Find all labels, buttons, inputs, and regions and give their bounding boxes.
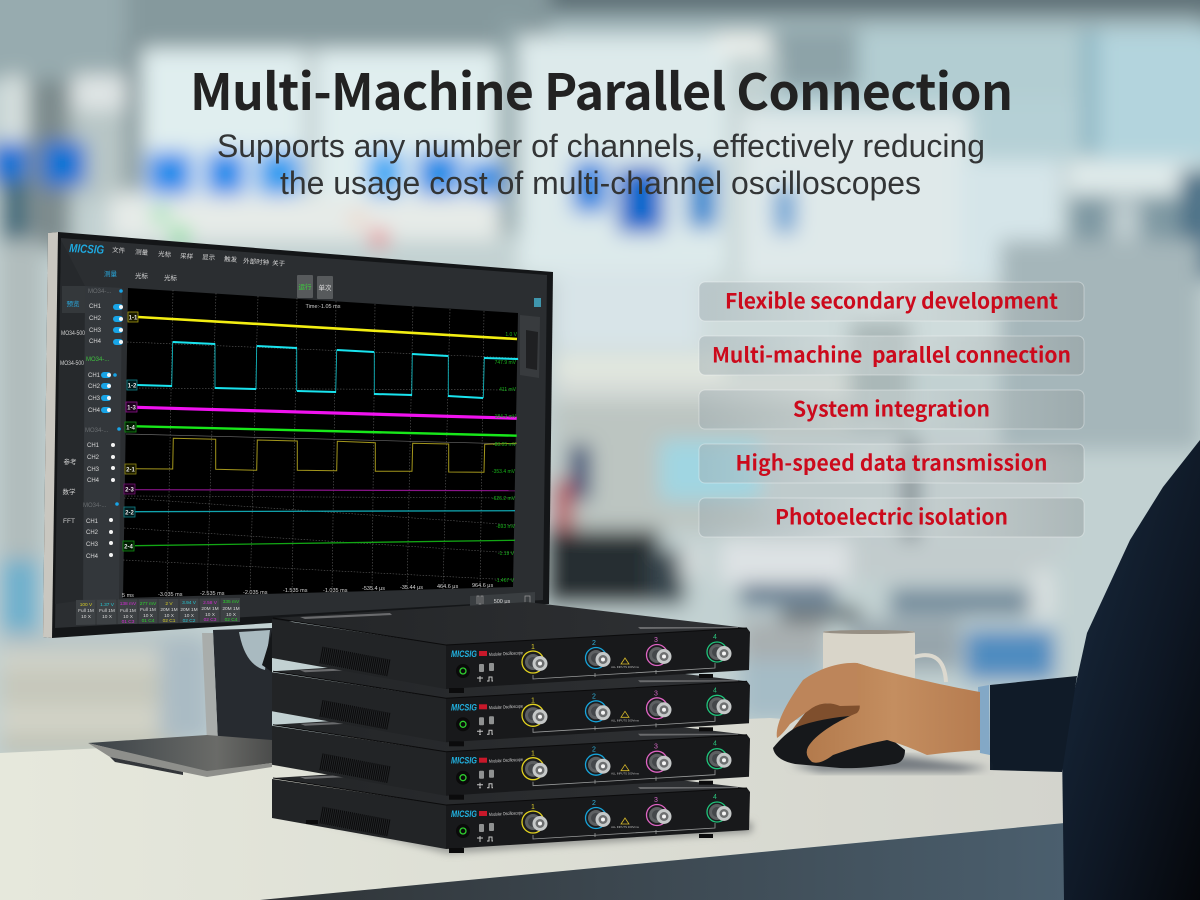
software menu bar: 光标 — [164, 273, 178, 282]
oscilloscope unit 1: MICSIG — [451, 649, 477, 660]
oscilloscope plot: 1-1 — [129, 316, 138, 322]
monitor — [43, 232, 553, 638]
device stack shadow — [275, 808, 752, 853]
channel status strip: 20M 1M — [160, 607, 178, 613]
channel status strip: 2.58 V — [203, 600, 218, 606]
oscilloscope plot: 2-4 — [124, 544, 133, 550]
channel status strip: 10 X — [164, 613, 175, 619]
oscilloscope unit 1: ALL INPUTS 300Vrms — [611, 665, 639, 669]
oscilloscope unit 1: Modular Oscilloscope — [489, 650, 523, 657]
oscilloscope plot: -1.535 ms — [283, 588, 308, 594]
oscilloscope unit 1: 4 — [713, 634, 717, 641]
software sidebar: CH3 — [88, 396, 101, 402]
oscilloscope plot: -1.19 V — [498, 551, 515, 557]
channel status strip: 1.37 V — [100, 602, 115, 608]
software sidebar: CH2 — [89, 316, 102, 322]
channel status strip: Full 1M — [78, 608, 94, 614]
computer mouse — [773, 715, 905, 768]
title: Multi-Machine Parallel Connection — [190, 53, 1013, 125]
software sidebar — [55, 240, 123, 604]
channel status strip: 02 C1 — [163, 618, 176, 624]
software sidebar: CH4 — [87, 478, 100, 484]
channel status strip: 02 C2 — [183, 618, 196, 624]
software menu bar: 触发 — [224, 254, 238, 264]
oscilloscope unit 3: ALL INPUTS 300Vrms — [611, 772, 639, 776]
oscilloscope plot — [122, 288, 518, 599]
timebase control — [470, 592, 535, 608]
software sidebar: 参考 — [64, 457, 77, 466]
oscilloscope plot: 964.6 μs — [472, 583, 493, 589]
feature: flexible secondary development — [699, 282, 1084, 321]
oscilloscope unit 4: 1 — [531, 804, 535, 811]
oscilloscope stack — [272, 602, 750, 853]
software sidebar: CH1 — [86, 519, 99, 525]
oscilloscope plot: 411 mV — [499, 387, 517, 393]
feature list — [699, 282, 1084, 537]
subtitle: Supports any number of channels, effectively reducing — [217, 128, 985, 164]
software sidebar: CH1 — [89, 304, 102, 310]
software sidebar: CH3 — [86, 542, 99, 548]
software sidebar: CH1 — [88, 373, 101, 379]
oscilloscope unit 2: MICSIG — [451, 702, 477, 713]
oscilloscope unit 1: 3 — [654, 637, 658, 644]
mouse shadow — [790, 756, 990, 772]
software sidebar: CH4 — [89, 339, 102, 345]
channel status strip: 01 C4 — [142, 618, 155, 624]
channel status strip: 2 V — [165, 601, 173, 607]
timebase control: 500 μs — [494, 599, 511, 605]
subtitle — [217, 128, 985, 201]
software sidebar: MO34-... — [88, 289, 112, 295]
channel status strip: 10 X — [123, 614, 134, 620]
oscilloscope plot: -2.035 ms — [243, 590, 268, 596]
oscilloscope unit 3: MICSIG — [451, 756, 477, 767]
channel status strip: 10 X — [81, 614, 92, 620]
software sidebar: CH3 — [87, 467, 100, 473]
subtitle: the usage cost of multi-channel oscilloscopes — [280, 165, 921, 201]
oscilloscope unit 1: 2 — [592, 640, 596, 647]
oscilloscope unit 3: 4 — [713, 741, 717, 748]
software menu bar: 测量 — [104, 270, 118, 278]
monitor bezel — [43, 232, 553, 638]
oscilloscope plot: -893 mV — [496, 524, 516, 530]
software sidebar: CH3 — [89, 328, 102, 334]
oscilloscope unit 3: 2 — [592, 747, 596, 754]
software menu bar: 采样 — [180, 251, 194, 261]
oscilloscope unit 4 — [272, 762, 750, 853]
feature: system integration — [699, 390, 1084, 429]
feature: high-speed data transmission: High-speed data transmission — [736, 448, 1048, 478]
software menu bar — [69, 241, 541, 378]
software sidebar: MO34-500 — [61, 331, 86, 337]
oscilloscope unit 4: 3 — [654, 797, 658, 804]
software menu bar: 外部时钟 — [243, 256, 270, 267]
oscilloscope unit 4: 4 — [713, 794, 717, 801]
channel status strip: Full 1M — [120, 608, 136, 614]
oscilloscope unit 2: ALL INPUTS 300Vrms — [611, 718, 639, 722]
channel status strip: 10 X — [143, 613, 154, 619]
oscilloscope unit 2: 4 — [713, 687, 717, 694]
channel status strip: 277 mV — [140, 601, 157, 607]
oscilloscope unit 3: 3 — [654, 744, 658, 751]
channel status strip: 335 mV — [223, 599, 240, 605]
channel status strip: 20M 1M — [222, 606, 240, 612]
software menu bar: 单次 — [318, 283, 332, 292]
channel status strip: 3.94 V — [182, 600, 197, 606]
feature: photoelectric isolation — [699, 498, 1084, 537]
channel status strip: Full 1M — [99, 608, 115, 614]
oscilloscope unit 3 — [272, 709, 750, 800]
oscilloscope plot: -535.4 μs — [362, 586, 385, 592]
software sidebar: CH2 — [87, 455, 100, 461]
software sidebar: 预览 — [66, 299, 80, 308]
oscilloscope plot: 2-1 — [126, 468, 135, 474]
oscilloscope plot: 1-3 — [127, 406, 136, 412]
table — [0, 718, 1070, 900]
monitor stand — [88, 628, 272, 777]
oscilloscope plot: -1.467 V — [495, 578, 515, 584]
channel status strip: 20M 1M — [201, 606, 219, 612]
oscilloscope plot: -626.2 mV — [492, 496, 516, 502]
software sidebar: MO34-... — [86, 357, 110, 363]
oscilloscope plot: 747.9 mV — [495, 360, 517, 366]
software menu bar: MICSIG — [69, 241, 105, 257]
oscilloscope unit 2: 3 — [654, 690, 658, 697]
oscilloscope plot: 464.6 μs — [437, 584, 458, 590]
channel status strip: 02 C4 — [225, 617, 238, 623]
channel status strip: 100 V — [80, 602, 93, 608]
coffee cup — [823, 630, 946, 691]
oscilloscope plot: 1-4 — [126, 426, 135, 432]
oscilloscope unit 2: Modular Oscilloscope — [489, 704, 523, 710]
software sidebar: MO34-... — [85, 428, 109, 434]
oscilloscope unit 2: 1 — [531, 697, 535, 704]
oscilloscope plot: -2.535 ms — [200, 591, 225, 597]
feature: flexible secondary development: Flexible secondary development — [725, 286, 1058, 316]
oscilloscope unit 2 — [272, 655, 750, 746]
man's arm and body — [978, 440, 1200, 900]
feature: multi-machine parallel connection: Multi-machine parallel connection — [712, 340, 1071, 370]
oscilloscope unit 2: 2 — [592, 693, 596, 700]
software sidebar: CH2 — [86, 530, 99, 536]
oscilloscope plot: 1.0 V — [505, 332, 518, 338]
channel status strip: 10 X — [226, 612, 237, 618]
feature: high-speed data transmission — [699, 444, 1084, 483]
oscilloscope plot: 184.2 mV — [495, 414, 517, 420]
oscilloscope plot: -3.035 ms — [158, 592, 183, 598]
oscilloscope unit 1 — [272, 602, 750, 693]
oscilloscope unit 4: ALL INPUTS 300Vrms — [611, 825, 639, 829]
feature: system integration: System integration — [793, 394, 990, 424]
oscilloscope unit 4: 2 — [592, 800, 596, 807]
channel status strip: 10 X — [205, 612, 216, 618]
shirt cuff — [978, 685, 990, 755]
channel status strip: 10 X — [102, 614, 113, 620]
software sidebar: MO34-500 — [60, 361, 85, 367]
oscilloscope plot: -83.05 mV — [493, 442, 517, 448]
software menu bar: 运行 — [298, 282, 312, 291]
channel status strip: 138 mV — [120, 601, 137, 607]
software menu bar: 光标 — [135, 271, 148, 280]
channel status strip: 10 X — [184, 613, 195, 619]
channel status strip — [76, 598, 240, 625]
oscilloscope plot: -353.4 mV — [492, 469, 516, 475]
software sidebar: FFT — [63, 518, 75, 525]
oscilloscope plot: 1-2 — [128, 384, 137, 390]
oscilloscope unit 4: Modular Oscilloscope — [489, 810, 523, 817]
oscilloscope unit 4: MICSIG — [451, 809, 477, 820]
oscilloscope plot: 2-2 — [125, 510, 134, 516]
channel status strip: 01 C3 — [122, 619, 135, 625]
oscilloscope plot: -1.035 ms — [323, 588, 348, 594]
oscilloscope unit 3: 1 — [531, 751, 535, 758]
oscilloscope plot: -35.44 μs — [400, 585, 423, 591]
feature: photoelectric isolation: Photoelectric isolation — [775, 502, 1008, 532]
oscilloscope plot: Time:-1.05 ms — [306, 304, 341, 310]
channel status strip: 20M 1M — [180, 607, 198, 613]
software sidebar: CH1 — [87, 443, 100, 449]
hand on mouse — [777, 663, 980, 763]
oscilloscope plot: 5 ms — [122, 593, 134, 599]
software menu bar: 文件 — [112, 245, 126, 255]
software menu bar: 光标 — [158, 249, 172, 259]
software sidebar: MO34-... — [83, 503, 107, 509]
suit body — [1062, 440, 1200, 900]
software menu bar: 测量 — [135, 248, 149, 257]
oscilloscope plot: 2-3 — [125, 488, 134, 494]
software sidebar: 数学 — [62, 487, 76, 496]
channel status strip: 02 C3 — [204, 617, 217, 623]
software sidebar: CH2 — [88, 384, 101, 390]
suit sleeve — [990, 676, 1077, 772]
software menu bar: 关于 — [272, 258, 286, 268]
oscilloscope unit 3: Modular Oscilloscope — [489, 757, 523, 764]
software menu bar: 显示 — [202, 253, 216, 262]
shadow between fingers — [792, 702, 862, 730]
software sidebar: CH4 — [88, 408, 101, 414]
oscilloscope unit 1: 1 — [531, 644, 535, 651]
channel status strip: Full 1M — [140, 607, 156, 613]
software sidebar: CH4 — [86, 554, 99, 560]
